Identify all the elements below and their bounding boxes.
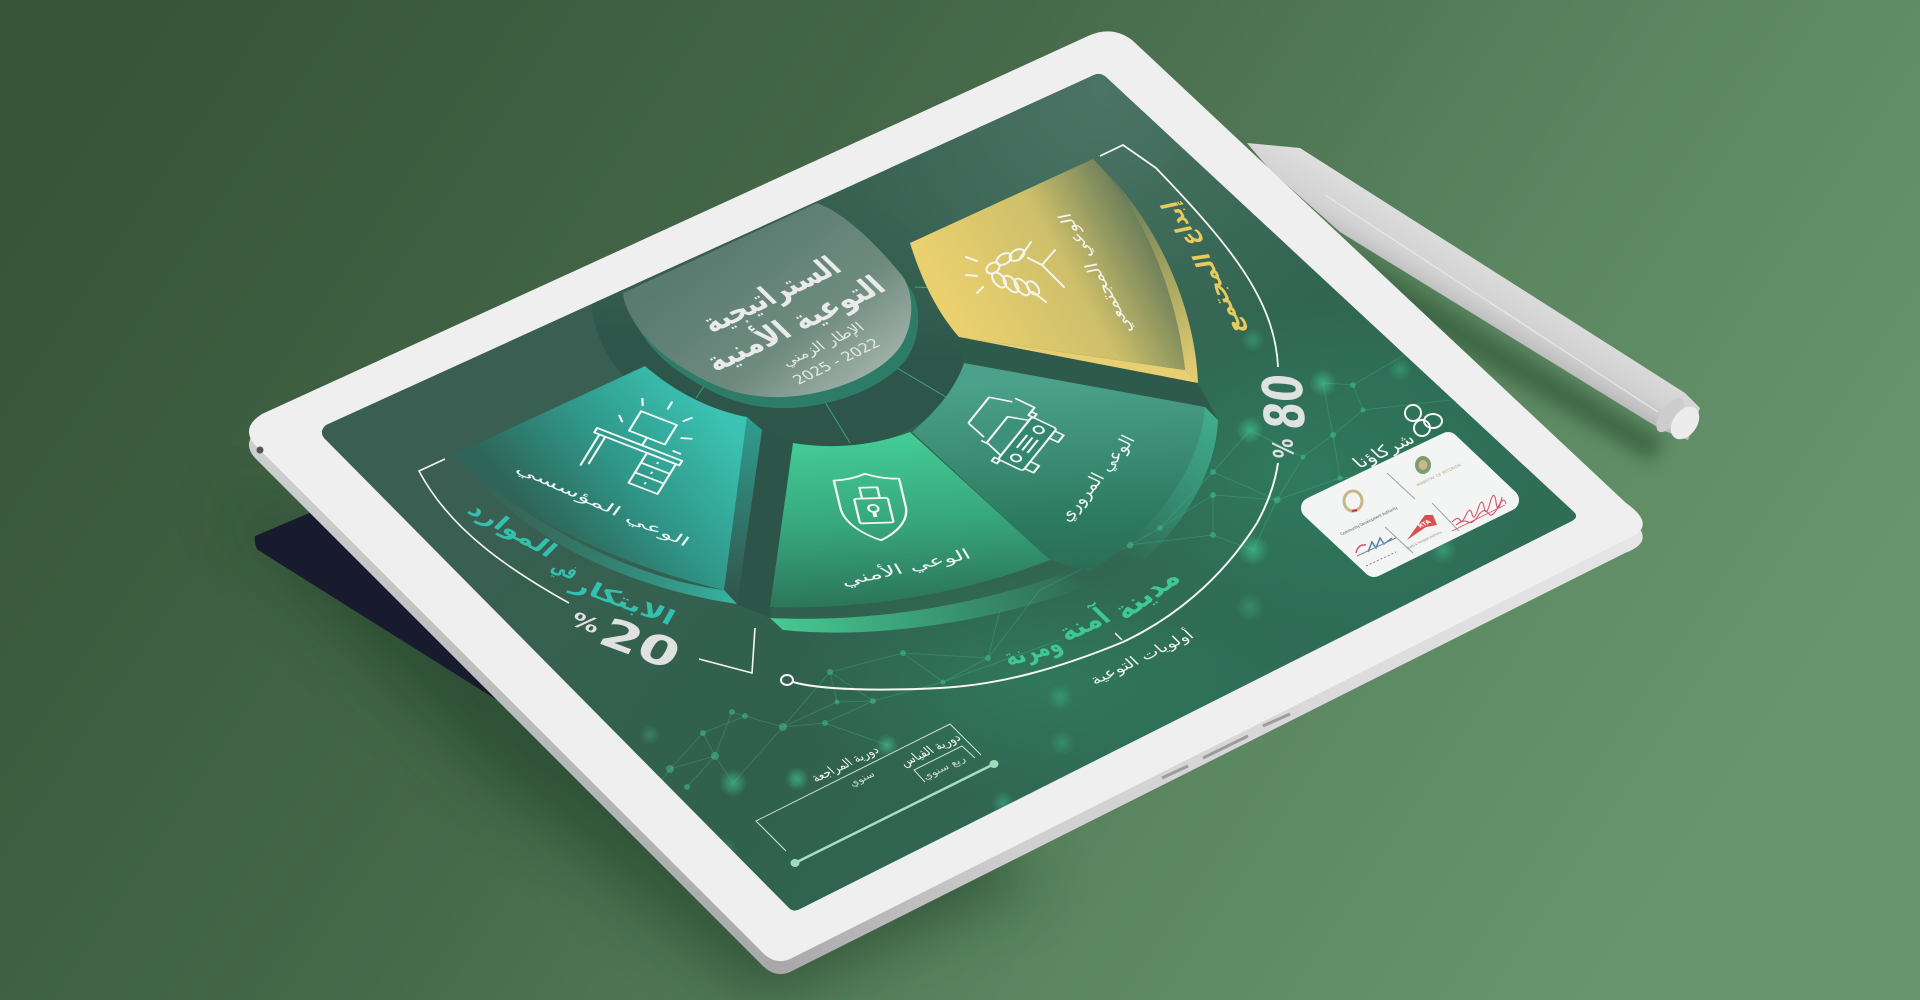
hub backdrop disc <box>592 241 1218 618</box>
bracket inner <box>914 746 975 782</box>
icon: cars <box>953 389 1072 479</box>
logo: community development authority: Community Development Authority <box>1339 505 1400 537</box>
icon: desk with computer <box>576 384 709 496</box>
bracket outer <box>756 724 981 851</box>
icon: shield lock <box>832 473 914 541</box>
logo: community development authority <box>1339 491 1400 537</box>
stat: 80 percent: 80 <box>1251 372 1319 431</box>
label: safe and resilient city: آمنة <box>1049 601 1118 647</box>
upper right arc bracket <box>1100 145 1278 367</box>
lower bracket <box>699 628 755 673</box>
left arc bracket <box>419 459 569 603</box>
label: safe and resilient city: مدينة <box>1105 565 1188 625</box>
text: our partners: شركاؤنا <box>1349 431 1420 472</box>
label: community creativity: إبداع <box>1155 199 1206 248</box>
text: review cycle: دورية المراجعة <box>808 744 883 785</box>
label: innovation in resources <box>461 497 680 630</box>
priorities arc <box>781 463 1278 690</box>
segment: institutional awareness (teal) <box>453 366 762 604</box>
network background <box>640 300 1530 862</box>
segment: community awareness (yellow) <box>910 159 1198 383</box>
tablet shadow <box>220 500 1040 1000</box>
logo: RTA: Roads & Transport Authority <box>1406 531 1443 550</box>
label: الوعي المؤسسي <box>512 461 693 550</box>
icon: handshake <box>966 242 1064 302</box>
label: innovation in resources: الموارد <box>461 497 563 562</box>
logo: blue emblem <box>1356 538 1396 566</box>
stat: 20 percent: % <box>566 607 605 638</box>
partners heading <box>1349 405 1442 472</box>
icon: partners rings <box>1405 405 1442 436</box>
stat: 80 percent: % <box>1266 437 1301 460</box>
text: measurement cycle: دورية القياس <box>896 731 965 770</box>
logo: ministry of interior: MINISTRY OF INTERIOR <box>1415 463 1463 488</box>
logo: RTA: RTA <box>1416 519 1433 529</box>
tablet body <box>249 31 1643 974</box>
text: annual: سنوي <box>846 769 878 789</box>
subtitle: الإطار الزمني <box>777 319 868 370</box>
stat: 20 percent: 20 <box>591 609 689 678</box>
text: quarterly: ربع سنوي <box>919 754 968 782</box>
pen shadow <box>1320 245 1665 462</box>
title line 1: الستراتيجية <box>693 251 849 339</box>
label: الوعي الأمني <box>836 545 974 590</box>
segment: security awareness <box>770 432 1090 633</box>
label: community creativity <box>1155 199 1250 335</box>
segment: road awareness <box>912 363 1218 600</box>
label: safe and resilient city: ومرنة <box>996 631 1068 672</box>
hub spokes <box>696 287 946 443</box>
label: innovation in resources: الابتكار <box>565 570 680 630</box>
title line 2: التوعية الأمنية <box>695 269 894 378</box>
screen <box>322 74 1576 911</box>
logo: calligraphy <box>1452 495 1506 531</box>
timeline line <box>790 760 998 867</box>
label: community creativity: المجتمع <box>1187 251 1250 335</box>
label: الوعي المجتمعي <box>1053 211 1138 335</box>
stylus pen <box>1247 143 1705 445</box>
partner logos card <box>1312 443 1508 566</box>
timeline <box>756 724 998 867</box>
logo: RTA <box>1406 515 1443 550</box>
label: innovation in resources: في <box>547 554 584 584</box>
label: safe and resilient city <box>996 565 1188 672</box>
label: الوعي المروري <box>1053 432 1141 525</box>
tablet kickstand <box>255 512 560 700</box>
hub circle with title <box>623 203 918 408</box>
stat: 80 percent <box>1251 372 1319 460</box>
text: awareness priorities: أولويات التوعية <box>1084 626 1198 688</box>
years: 2025 - 2022 <box>789 335 884 388</box>
